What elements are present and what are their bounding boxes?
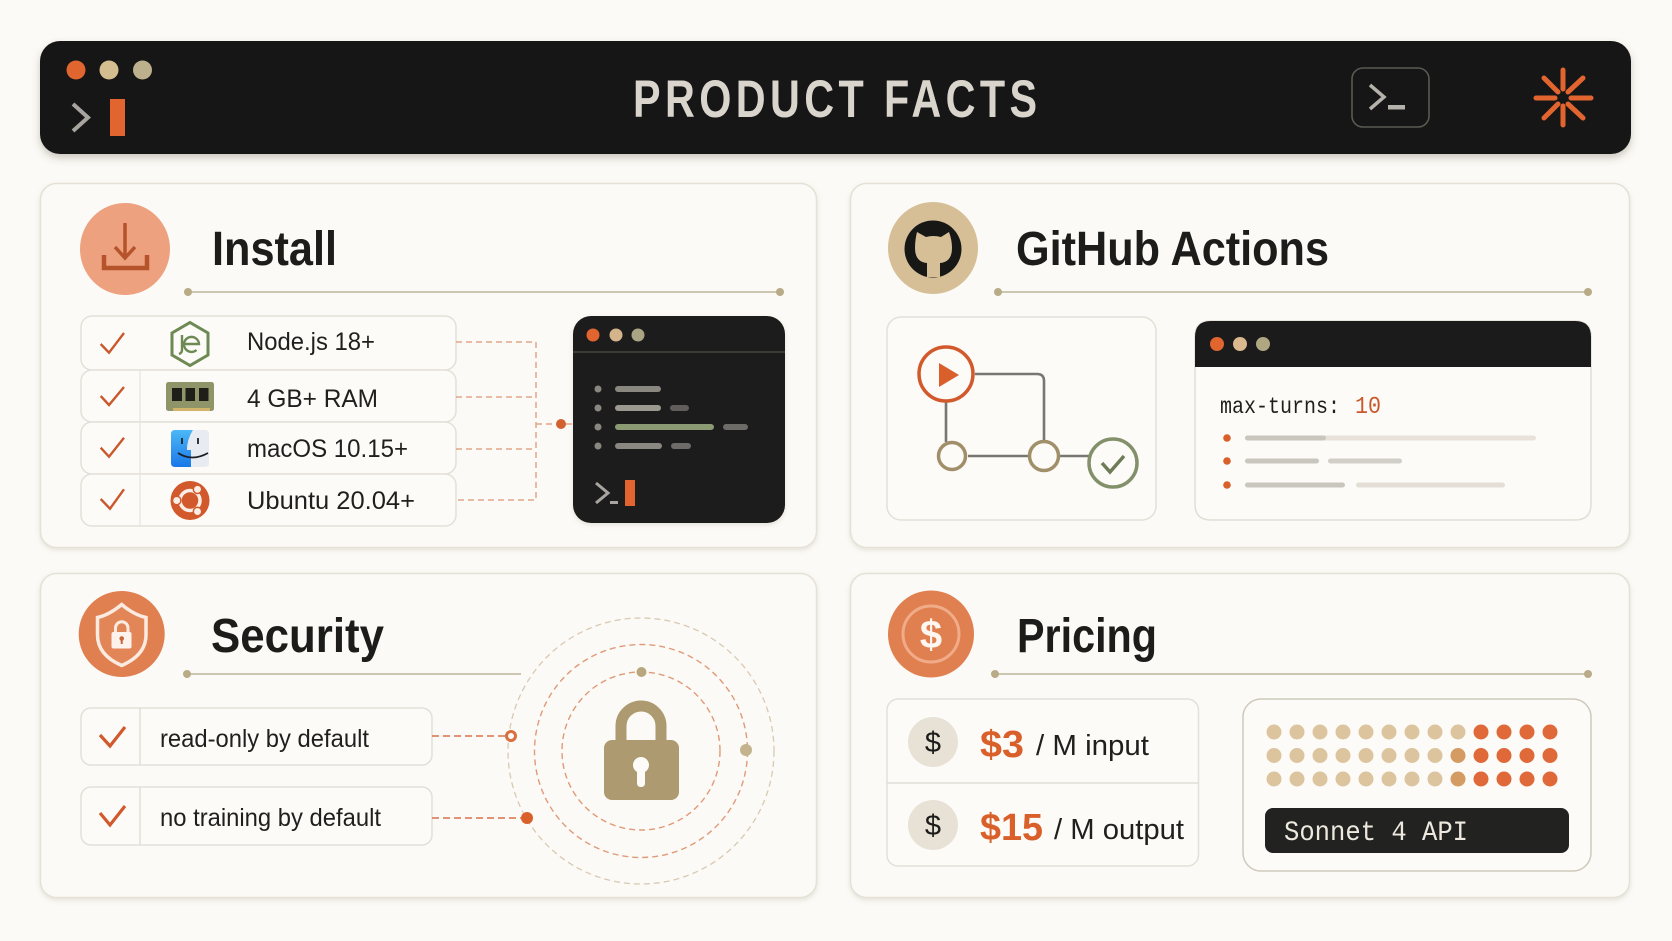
row: node <box>81 316 456 370</box>
connector lines <box>432 736 521 818</box>
heading: install: Install <box>212 223 337 276</box>
row: ram: 4 GB+ RAM <box>247 385 378 413</box>
code text: max-turns: <box>1220 394 1340 420</box>
price: output: $15 <box>980 807 1043 849</box>
icon: download <box>80 203 170 295</box>
row: no training <box>81 787 432 845</box>
value: 10 <box>1355 394 1381 421</box>
dot matrix <box>1266 724 1558 786</box>
icon: dollar coin: $ <box>920 613 942 657</box>
row: ubuntu <box>81 474 456 526</box>
icon: dollar coin <box>888 590 974 678</box>
row: ram <box>81 370 456 422</box>
panel: install <box>40 184 816 548</box>
price: output: / M output <box>1054 814 1184 846</box>
price: input <box>908 717 1149 767</box>
price card <box>887 699 1198 866</box>
heading: github actions: GitHub Actions <box>1016 223 1329 276</box>
heading rule <box>183 670 521 678</box>
panel: pricing <box>850 574 1630 898</box>
model label: Sonnet 4 API <box>1284 818 1468 849</box>
connector lines <box>456 342 573 500</box>
window dots <box>66 60 152 80</box>
row: read-only: read-only by default <box>160 725 369 753</box>
icon: shield <box>79 591 165 677</box>
row: macos <box>81 422 456 474</box>
price: output: $ <box>925 810 941 842</box>
lock with rings <box>506 618 774 884</box>
price: input: $ <box>925 727 941 759</box>
heading: security: Security <box>211 610 384 663</box>
icon: orange asterisk <box>1536 70 1591 125</box>
workflow diagram card <box>887 317 1156 520</box>
panel: github actions <box>850 184 1630 548</box>
icon: terminal badge <box>1352 68 1429 127</box>
heading rule <box>994 288 1592 296</box>
heading: pricing: Pricing <box>1017 610 1157 663</box>
title: PRODUCT FACTS <box>633 70 1037 129</box>
price: input: / M input <box>1036 730 1149 762</box>
terminal window <box>573 316 785 523</box>
row: read-only <box>81 708 432 765</box>
heading rule <box>184 288 784 296</box>
model card <box>1243 699 1591 871</box>
panel: security <box>40 574 816 898</box>
price: output <box>908 800 1184 850</box>
heading rule <box>991 670 1592 678</box>
icon: prompt and cursor <box>73 99 125 136</box>
config window <box>1195 321 1591 520</box>
requirements list <box>81 316 456 526</box>
row: macos: macOS 10.15+ <box>247 435 408 463</box>
header bar <box>40 41 1631 154</box>
row: no training: no training by default <box>160 804 381 832</box>
icon: github <box>888 202 978 294</box>
model label <box>1265 808 1569 853</box>
price: input: $3 <box>980 724 1024 766</box>
row: node: Node.js 18+ <box>247 328 375 356</box>
row: ubuntu: Ubuntu 20.04+ <box>247 487 415 515</box>
